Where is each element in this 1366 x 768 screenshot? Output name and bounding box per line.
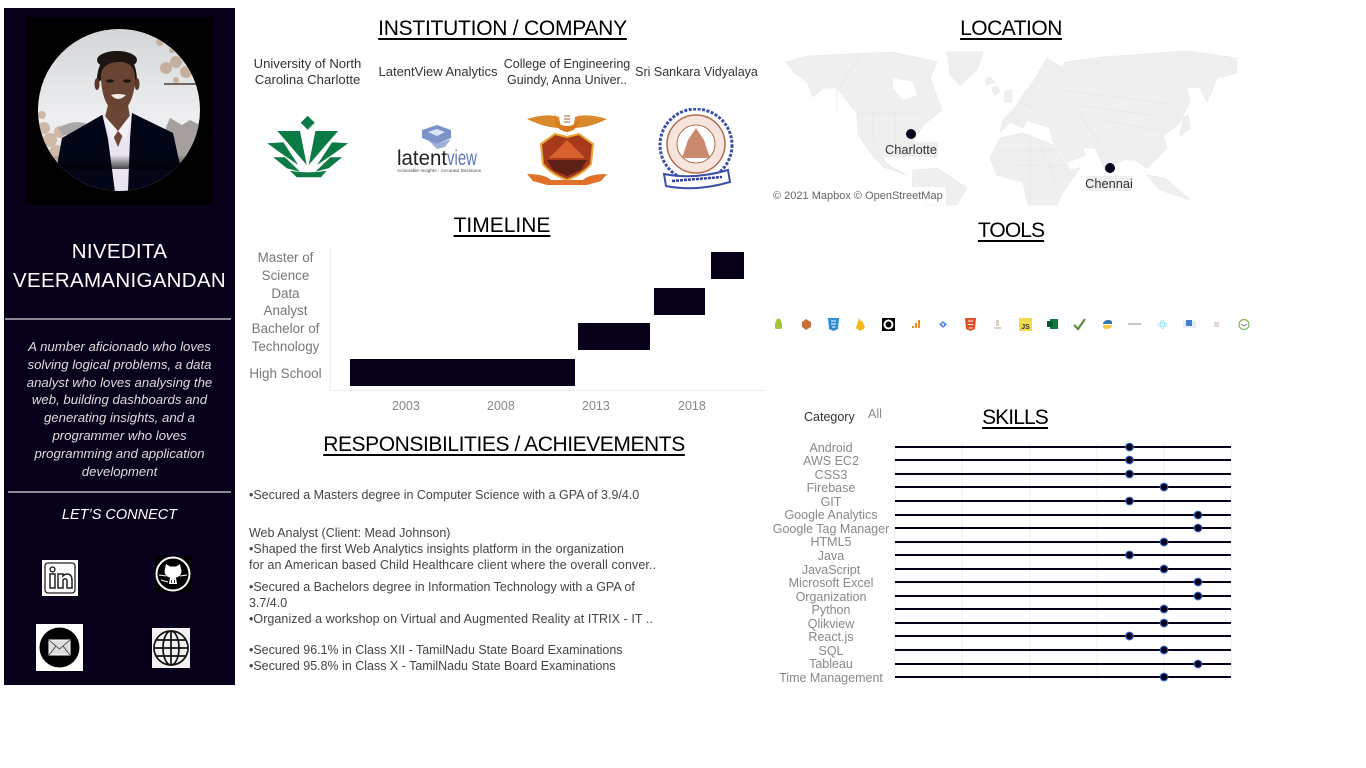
skill names: Android (809, 441, 853, 455)
heading: tools: TOOLS (978, 219, 1044, 242)
text: bachelors achievement (249, 580, 653, 626)
bio text: solving logical problems, a data (28, 357, 212, 372)
filter value: All (868, 407, 882, 421)
skill names: Google Tag Manager (773, 522, 889, 536)
text: bachelors achievement: 3.7/4.0 (249, 596, 287, 610)
bio text: analyst who loves analysing the (27, 375, 212, 390)
excel (1047, 319, 1058, 329)
skill names: GIT (821, 495, 841, 509)
chart: skills lollipop (773, 441, 1232, 685)
lollipop plot (894, 441, 1232, 682)
bio text: A number aficionado who loves (28, 339, 211, 354)
react (1158, 320, 1167, 329)
bar: bachelor of technology (578, 323, 650, 350)
label: LatentView: LatentView Analytics (378, 64, 498, 79)
icon row: tools (775, 318, 1250, 331)
row labels (252, 250, 320, 354)
skill names: Microsoft Excel (789, 576, 873, 590)
row labels: Science (262, 268, 309, 283)
year 2013: 2013 (582, 399, 610, 413)
label: UNC Charlotte: Carolina Charlotte (255, 72, 360, 87)
google tag manager (939, 321, 947, 328)
firebase (856, 318, 865, 331)
row labels: Data (271, 286, 300, 301)
bio text: generating insights, and a (44, 410, 195, 425)
name: VEERAMANIGANDAN (13, 269, 226, 292)
heading: timeline: TIMELINE (454, 214, 550, 237)
name (13, 240, 226, 292)
skill names: Firebase (807, 481, 855, 495)
row labels: Technology (252, 339, 319, 354)
panel: profile sidebar (4, 8, 235, 685)
label: UNC Charlotte: University of North (254, 56, 361, 71)
timeline axes (330, 248, 331, 390)
skill names: Java (818, 549, 844, 563)
institution names (254, 56, 758, 87)
year axis labels: 2003 (392, 399, 420, 413)
heading: responsibilities: RESPONSIBILITIES / ACHIEVEMENTS (323, 433, 685, 456)
row label: high school: High School (249, 366, 322, 381)
skill names: CSS3 (815, 468, 847, 482)
label: Sri Sankara: Sri Sankara Vidyalaya (635, 65, 758, 79)
skill names: Qlikview (808, 617, 854, 631)
aws ec2 (802, 319, 811, 330)
row labels: Master of (258, 250, 313, 265)
heading: institution: INSTITUTION / COMPANY (378, 17, 627, 40)
javascript (1019, 318, 1032, 331)
skill names: Tableau (809, 657, 853, 671)
icon: website globe (152, 628, 190, 668)
year 2018: 2018 (678, 399, 706, 413)
skill names: Python (812, 603, 850, 617)
skill names: Time Management (779, 671, 883, 685)
text: high school achievement: •Secured 95.8% in Class X - TamilNadu State Board Examinations (249, 659, 616, 673)
south america (912, 168, 967, 205)
logo: LatentView: latent (397, 147, 447, 170)
text: bachelors achievement: •Secured a Bachelors degree in Information Technology with a GPA of (249, 580, 635, 594)
logo: UNC Charlotte (267, 116, 348, 178)
sql (1214, 322, 1219, 327)
chart: timeline gantt (249, 248, 765, 413)
heading: skills: SKILLS (982, 406, 1048, 429)
skill names (773, 441, 890, 685)
lakes and seas (893, 78, 917, 100)
bio text (27, 339, 212, 479)
text: high school achievement (249, 643, 623, 673)
eurasia (1000, 51, 1237, 170)
bio text: programmer who loves (52, 428, 187, 443)
html5 (965, 318, 976, 331)
logo: Sri Sankara (658, 108, 734, 190)
bio text: web, building dashboards and (32, 392, 207, 407)
text: data analyst achievement (249, 526, 656, 572)
heading: location: LOCATION (960, 17, 1062, 40)
skill names: HTML5 (810, 535, 851, 549)
text: bachelors achievement: •Organized a workshop on Virtual and Augmented Reality at ITRIX - IT .. (249, 612, 653, 626)
connect heading: LET’S CONNECT (62, 507, 177, 523)
marker: Chennai: Chennai (1085, 176, 1133, 191)
year 2008: 2008 (487, 399, 515, 413)
bio text: development (82, 464, 157, 479)
skill names: JavaScript (802, 563, 860, 577)
text: high school achievement: •Secured 96.1% in Class XII - TamilNadu State Board Examinations (249, 643, 623, 657)
text: data analyst achievement: for an American based Child Healthcare client where the overall conver.. (249, 558, 656, 572)
text: data analyst achievement: Web Analyst (Client: Mead Johnson) (249, 526, 450, 540)
divider (8, 491, 231, 493)
qlikview (1128, 323, 1141, 325)
label: UNC Charlotte (254, 56, 361, 87)
marker: Charlotte (884, 129, 938, 157)
bar: data analyst (654, 288, 705, 315)
divider (5, 318, 231, 320)
island groups (985, 77, 1190, 200)
skill names: AWS EC2 (803, 454, 859, 468)
icon: linkedin (42, 560, 78, 596)
logo: LatentView (397, 125, 482, 173)
filter: category (804, 407, 882, 424)
marker: Chennai (1085, 163, 1133, 191)
skill names: Google Analytics (784, 508, 878, 522)
row labels: Bachelor of (252, 321, 319, 336)
north america (786, 52, 942, 175)
map: world locations (773, 51, 1238, 206)
skill names: Organization (796, 590, 866, 604)
icon: github (155, 556, 191, 592)
filter label: Category (804, 410, 855, 424)
bar: high school (350, 359, 575, 386)
label: CEG (504, 57, 630, 87)
label: CEG: Guindy, Anna Univer.. (507, 73, 627, 87)
bio text: programming and application (34, 446, 205, 461)
attribution (773, 187, 946, 205)
map: world locations: © 2021 Mapbox © OpenStreetMap (773, 190, 943, 202)
africa (990, 133, 1080, 205)
bar: master of science (711, 252, 744, 279)
tableau (1183, 320, 1196, 328)
label: CEG: College of Engineering (504, 57, 630, 71)
organization (1074, 319, 1085, 329)
css3 (828, 318, 839, 331)
name: NIVEDITA (72, 240, 167, 263)
skill names: React.js (808, 630, 854, 644)
google analytics (912, 320, 920, 328)
text: masters achievement: •Secured a Masters degree in Computer Science with a GPA of 3.9/4.0 (249, 488, 639, 502)
android (775, 318, 782, 329)
logo: LatentView: Actionable Insights - Accurate Decisions (397, 168, 482, 173)
python (1103, 320, 1112, 329)
text: data analyst achievement: •Shaped the first Web Analytics insights platform in the organization (249, 542, 624, 556)
skill names: SQL (818, 644, 844, 658)
logo: College of Engineering Guindy (527, 113, 607, 185)
marker: Charlotte: Charlotte (885, 142, 937, 157)
greenland (947, 52, 983, 85)
javascript: JS (1021, 324, 1030, 331)
portrait photo (25, 17, 213, 205)
time management (1239, 320, 1249, 330)
row labels: Analyst (264, 303, 307, 318)
github (882, 318, 895, 331)
java (994, 320, 1001, 329)
icon: email (36, 624, 83, 671)
